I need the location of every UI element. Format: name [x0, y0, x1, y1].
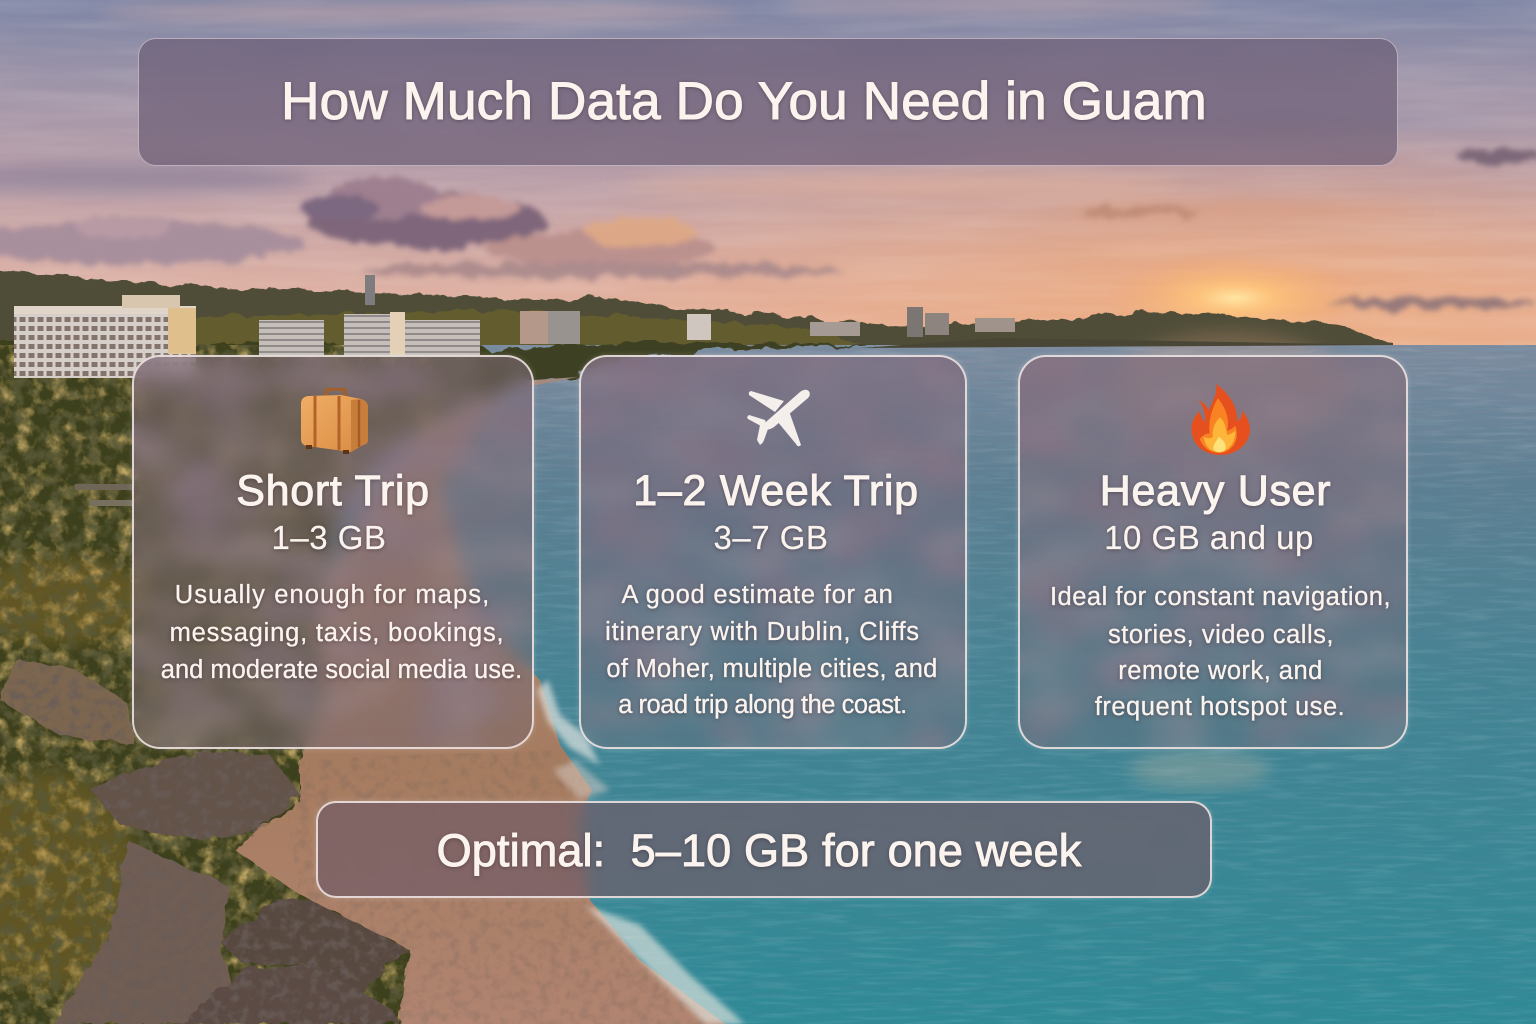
- sea: [0, 345, 1536, 1024]
- clouds: [0, 146, 1536, 309]
- panel: optimal callout: [316, 801, 1212, 898]
- heading: Heavy User: [1100, 467, 1331, 515]
- data amount: 3–7 GB: [714, 519, 828, 556]
- callout text: Optimal: 5–10 GB for one week: [437, 825, 1081, 876]
- description: [160, 580, 522, 684]
- panel: short trip: [132, 355, 534, 749]
- description: [604, 580, 938, 721]
- data amount: 1–3 GB: [272, 519, 386, 556]
- heading: 1–2 Week Trip: [633, 467, 919, 515]
- description: Usually enough for maps,: [175, 580, 490, 608]
- distant coast: [0, 270, 1395, 370]
- description: A good estimate for an: [621, 580, 894, 608]
- mottled haze behind glass cards: [130, 355, 1410, 749]
- icon: airplane: [747, 390, 810, 446]
- description: itinerary with Dublin, Cliffs: [605, 618, 920, 646]
- description: of Moher, multiple cities, and: [606, 654, 938, 682]
- heading: Short Trip: [236, 467, 430, 515]
- data amount: 10 GB and up: [1104, 519, 1314, 556]
- description: [1050, 582, 1391, 722]
- description: a road trip along the coast.: [618, 690, 907, 718]
- title banner: [138, 38, 1398, 166]
- description: messaging, taxis, bookings,: [170, 618, 504, 646]
- panel: heavy user: [1018, 355, 1408, 749]
- description: remote work, and: [1118, 656, 1323, 684]
- land and rocks: [0, 340, 530, 1024]
- panel: 1-2 week trip: [579, 355, 967, 749]
- description: frequent hotspot use.: [1095, 692, 1345, 720]
- icon: flame: [1191, 384, 1250, 455]
- description: Ideal for constant navigation,: [1050, 582, 1391, 610]
- beach: [200, 377, 725, 1024]
- buildings: [14, 275, 1015, 378]
- icon: suitcase: [301, 388, 368, 454]
- title: How Much Data Do You Need in Guam: [281, 72, 1207, 131]
- description: and moderate social media use.: [161, 656, 522, 684]
- description: stories, video calls,: [1108, 620, 1334, 648]
